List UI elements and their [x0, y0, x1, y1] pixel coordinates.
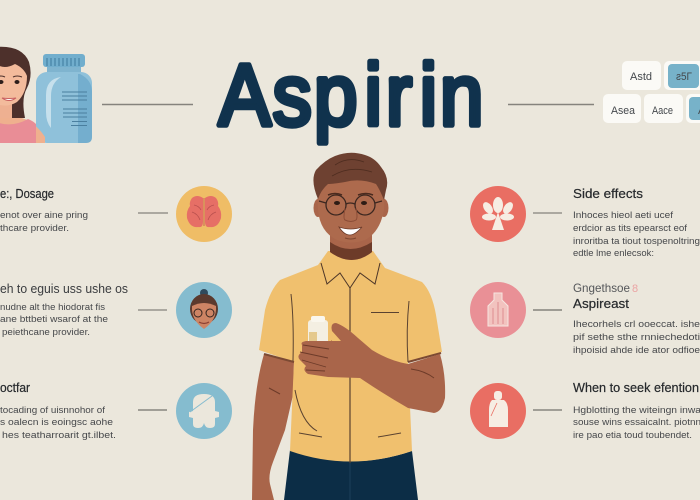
panel: dosage — [0, 186, 232, 242]
subheading: Gngethsoe — [573, 281, 630, 295]
text block — [573, 210, 700, 259]
text block: souse wins essaicalnt. piotnn — [573, 417, 700, 428]
text block — [573, 319, 700, 356]
accent mark: 8 — [632, 283, 638, 295]
heading: Aspireast — [573, 296, 629, 311]
text block: ane bttbeti wsarof at the — [0, 314, 108, 325]
text block: edtle lme enlecsok: — [573, 248, 654, 259]
text block: erdcior as tits epearsct eof — [573, 223, 687, 234]
text block — [0, 405, 116, 441]
central figure: man holding bottle — [252, 153, 445, 500]
left arm — [252, 354, 294, 500]
card Aace: Aace — [652, 105, 673, 117]
text block: pif sethe sthe rnniechedoti — [573, 332, 700, 343]
heading: e:, Dosage — [0, 186, 54, 201]
panel: when to seek attention — [470, 380, 700, 441]
neck — [330, 235, 372, 260]
icon: white figure — [176, 383, 232, 439]
forearm and hand — [298, 323, 445, 413]
panel: doctor — [0, 380, 232, 441]
heading: octfar — [0, 380, 31, 395]
text block — [0, 210, 88, 234]
glasses — [319, 195, 382, 215]
card blue top: ƨ5Γ — [676, 71, 692, 83]
connector — [533, 212, 562, 214]
icon: plant — [470, 186, 526, 242]
pill bottle — [308, 316, 328, 345]
woman — [0, 47, 45, 143]
connector — [533, 409, 562, 411]
text block: nudne alt the hiodorat fis — [0, 302, 105, 313]
text block: tocading of uisnnohor of — [0, 405, 105, 416]
connector — [533, 309, 562, 311]
panel: side effects — [470, 186, 700, 259]
text block — [573, 405, 700, 441]
heading: eh to eguis uss ushe os — [0, 281, 128, 296]
text block: Ihecorhels crl ooeccat. ishe — [573, 319, 700, 330]
text block: Inhoces hieol aeti ucef — [573, 210, 673, 221]
panel: when to use — [0, 281, 232, 338]
head — [313, 153, 388, 242]
collar — [321, 263, 380, 288]
heading: When to seek efention — [573, 380, 699, 395]
cards: top right labels — [603, 61, 700, 123]
shirt seams — [291, 288, 409, 463]
icon: face with glasses — [176, 282, 232, 338]
arm crease — [269, 388, 280, 394]
text block: enot over aine pring — [0, 210, 88, 221]
sleeve hems — [264, 353, 441, 362]
panel: aspirin group — [470, 281, 700, 356]
finger lines — [300, 345, 434, 378]
connector — [138, 409, 167, 411]
title: Aspirin — [219, 46, 483, 144]
text block: thcare provider. — [0, 223, 69, 234]
connector — [138, 309, 167, 311]
connector — [138, 212, 168, 214]
card Asea: Asea — [611, 105, 636, 117]
icon: bottle figure — [470, 282, 526, 338]
icon: person — [470, 383, 526, 439]
title rule left — [102, 104, 193, 106]
hair — [313, 153, 387, 200]
text block — [0, 302, 108, 338]
shirt — [259, 251, 442, 462]
text block: s oalecn is eoingsc aohe — [0, 417, 113, 428]
icon: woman with medicine bottle — [0, 47, 92, 143]
icon: brain — [176, 186, 232, 242]
title rule right — [508, 104, 594, 106]
text block: hes teatharroarit gt.ilbet. — [2, 430, 116, 441]
eyes — [334, 201, 340, 205]
text block: peiethcane provider. — [2, 327, 90, 338]
mouth — [339, 227, 362, 235]
text block: inroritba ta tiout tospenoltring — [573, 236, 700, 247]
pants — [284, 450, 418, 500]
heading: Side effects — [573, 186, 644, 201]
bottle — [36, 54, 92, 143]
text block: ire pao etia toud toubendet. — [573, 430, 692, 441]
nose — [344, 208, 357, 222]
text block: Hgblotting the witeingn inwa — [573, 405, 700, 416]
text block: ihpoisid ahde ide ator odfioe — [573, 345, 700, 356]
card Astd: Astd — [630, 71, 652, 83]
eyebrows — [328, 194, 373, 195]
